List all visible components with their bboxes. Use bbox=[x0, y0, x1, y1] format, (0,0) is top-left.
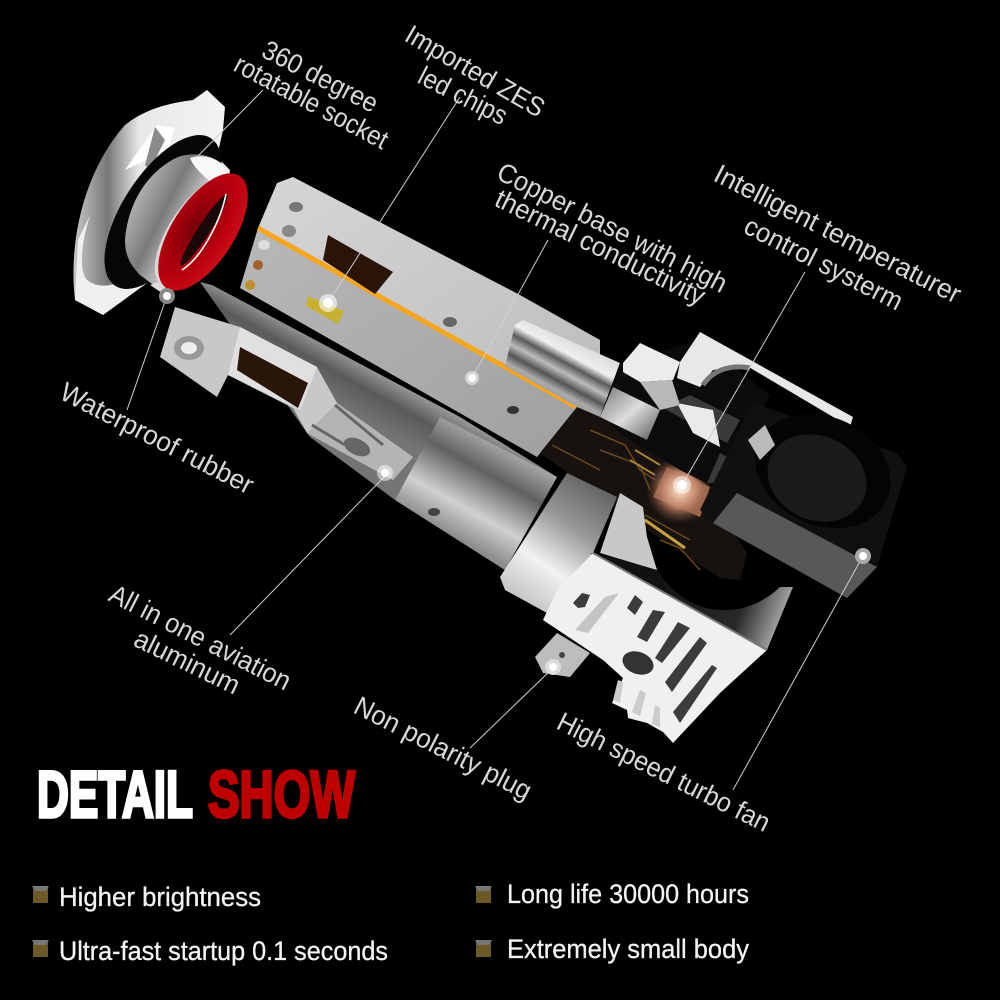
title: SHOW bbox=[208, 757, 355, 831]
callout dots bbox=[159, 288, 871, 675]
collar and heat sink bbox=[500, 473, 793, 743]
internal cooling assembly bbox=[600, 332, 853, 490]
upper rod and heat pipe bbox=[505, 320, 620, 417]
label: all in one aviation aluminum: All in one aviation bbox=[104, 579, 296, 696]
ZES led chips bbox=[306, 296, 344, 324]
lower aluminum body bbox=[160, 282, 557, 570]
circuit board bbox=[540, 407, 747, 580]
bullet 2: Ultra-fast startup 0.1 seconds bbox=[59, 936, 388, 966]
turbo fan bbox=[700, 392, 909, 598]
bulb exploded illustration bbox=[73, 90, 909, 743]
bullet 4: Extremely small body bbox=[507, 934, 749, 964]
waterproof rubber ring bbox=[141, 159, 265, 305]
label: all in one aviation aluminum: aluminum bbox=[129, 623, 245, 700]
label: copper base: thermal conductivity bbox=[490, 183, 711, 311]
label: 360 degree rotatable socket: 360 degree bbox=[257, 35, 383, 119]
bullet 1: Higher brightness bbox=[59, 882, 261, 912]
label: imported ZES led chips: led chips bbox=[413, 61, 512, 131]
bullet 3: Long life 30000 hours bbox=[507, 879, 749, 909]
label: copper base: Copper base with high bbox=[492, 157, 732, 299]
label: non polarity plug: Non polarity plug bbox=[349, 691, 537, 806]
label: waterproof rubber: Waterproof rubber bbox=[55, 377, 259, 500]
socket flange bbox=[73, 90, 251, 315]
title: DETAIL bbox=[37, 757, 193, 831]
feature list bbox=[32, 879, 749, 966]
label: 360 degree rotatable socket: rotatable socket bbox=[229, 49, 394, 155]
label: intelligent temperature control: Intelligent temperaturer bbox=[709, 159, 966, 309]
label: imported ZES led chips: Imported ZES bbox=[400, 19, 550, 123]
label: intelligent temperature control: control systerm bbox=[739, 211, 908, 316]
upper copper board bbox=[240, 177, 600, 457]
plug bbox=[535, 633, 590, 677]
leader lines bbox=[127, 90, 863, 790]
label: high speed turbo fan: High speed turbo fan bbox=[552, 707, 775, 838]
